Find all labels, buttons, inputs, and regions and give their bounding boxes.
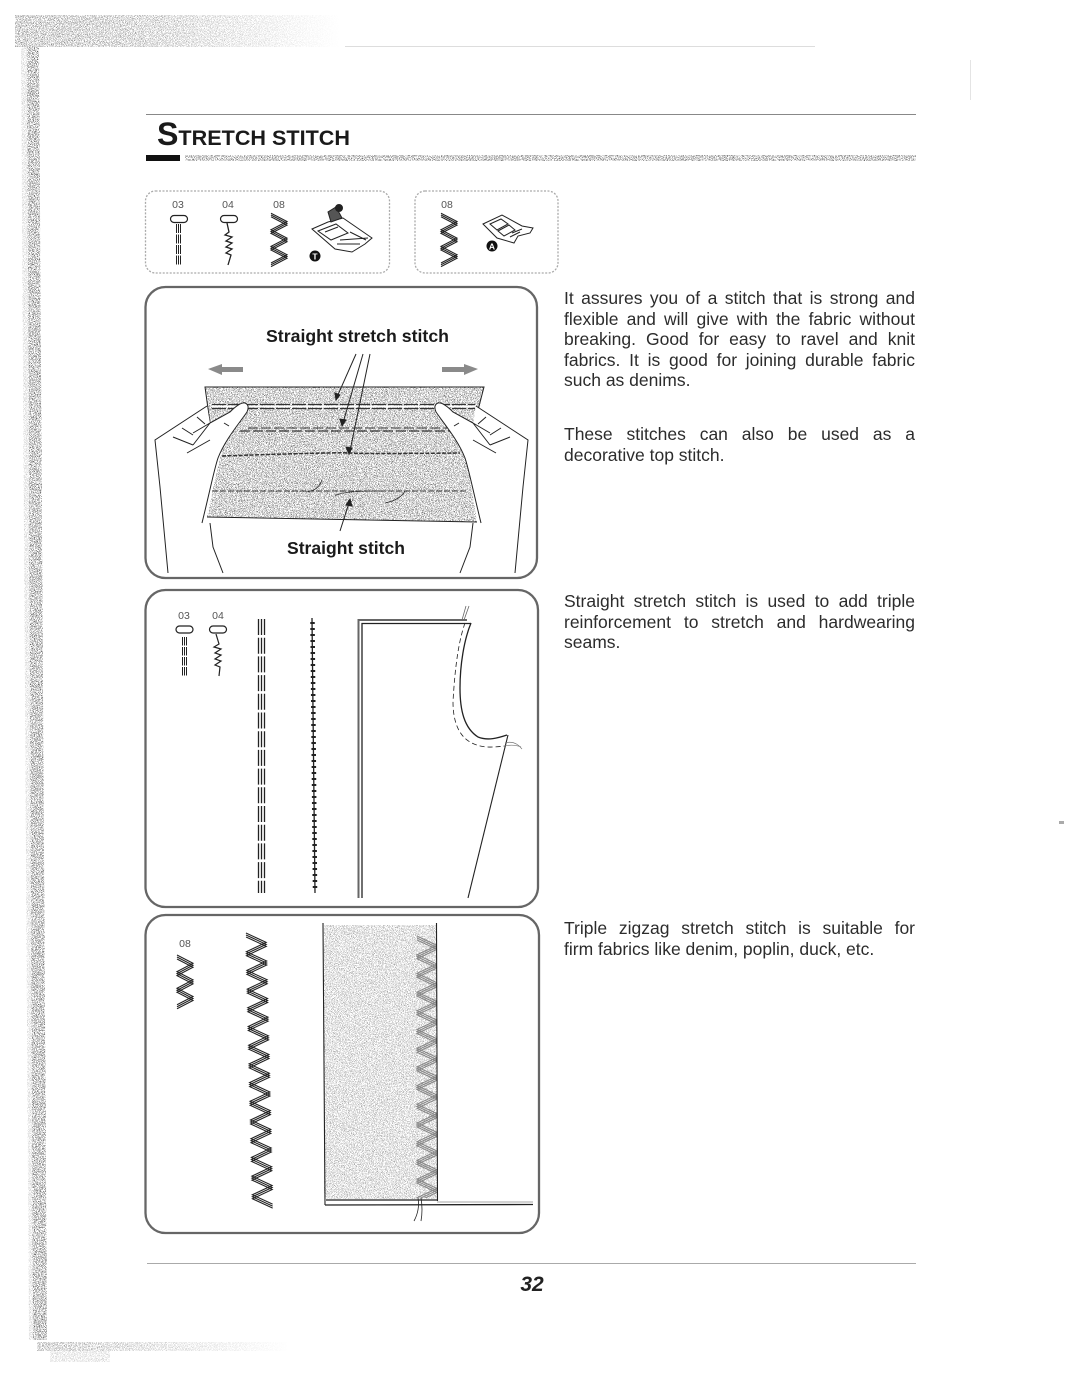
arrow: pull right xyxy=(442,364,478,375)
stitch numbers xyxy=(172,199,285,211)
stitch number: 08 xyxy=(179,938,191,950)
panel: straight stretch seam on trousers xyxy=(146,590,538,907)
arrow: pull left xyxy=(208,364,243,375)
text block: strength and uses: It assures you of a stitch that is strong and xyxy=(564,288,915,308)
stitch numbers: 08 xyxy=(273,199,285,211)
icon: badge T xyxy=(310,250,320,262)
left hand xyxy=(155,403,248,573)
illustration: trousers seam xyxy=(358,606,522,898)
label: straight stitch: Straight stitch xyxy=(287,538,405,558)
icon: needle positions xyxy=(176,626,226,633)
panel: stitch selection with foot T xyxy=(146,191,390,273)
stitch numbers: 04 xyxy=(212,610,224,622)
text block: triple zigzag stretch stitch: Triple zigzag stretch stitch is suitable for xyxy=(564,918,915,938)
panel: triple zigzag stretch stitch xyxy=(146,915,539,1233)
text block: triple zigzag stretch stitch: firm fabrics like denim, poplin, duck, etc. xyxy=(564,939,874,959)
icon: needle position 04 xyxy=(220,216,238,222)
panel: stitch selection with foot A xyxy=(415,191,558,273)
text block: straight stretch stitch: Straight stretch stitch is used to add triple xyxy=(564,591,915,611)
icon: triple zigzag stitch xyxy=(441,213,457,267)
text block: strength and uses xyxy=(564,288,915,390)
sample: tall triple zigzag xyxy=(246,933,273,1208)
icon: badge A xyxy=(486,240,498,252)
stitch number: 08 xyxy=(441,199,453,211)
text block: strength and uses: flexible and will give with the fabric without xyxy=(564,309,915,329)
stitch numbers xyxy=(178,610,224,622)
icon: badge A: A xyxy=(489,242,495,252)
icon: presser foot A xyxy=(483,215,533,243)
text block: straight stretch stitch: reinforcement to stretch and hardwearing xyxy=(564,612,915,632)
icon: stretch zigzag stitch xyxy=(225,223,232,265)
text block: decorative use: These stitches can also be used as a xyxy=(564,424,915,444)
icon: triple straight stitch xyxy=(176,224,180,265)
sample: tall stretch stitch xyxy=(312,618,315,893)
title bar xyxy=(146,155,916,161)
icon: presser foot T xyxy=(312,204,372,252)
text block: strength and uses: such as denims. xyxy=(564,370,690,390)
title: STRETCH STITCH xyxy=(157,116,350,152)
header rule xyxy=(146,114,916,115)
icon: needle position 03 xyxy=(170,216,188,222)
label: straight stretch stitch: Straight stretch stitch xyxy=(266,326,449,346)
stitch numbers: 04 xyxy=(222,199,234,211)
panel: straight stretch stitch fabric test xyxy=(146,287,537,578)
text block: straight stretch stitch xyxy=(564,591,915,652)
text block: decorative use xyxy=(564,424,915,465)
callout arrows: straight stretch stitch xyxy=(335,354,370,454)
text block: triple zigzag stretch stitch xyxy=(564,918,915,959)
illustration: zigzag on denim hem xyxy=(323,923,533,1221)
page number: 32 xyxy=(520,1273,544,1296)
callout arrow: straight stitch xyxy=(340,499,352,531)
icon: triple zigzag stitch xyxy=(271,213,287,267)
stitch numbers: 03 xyxy=(178,610,190,622)
stitch numbers: 03 xyxy=(172,199,184,211)
icon: small stretch stitch xyxy=(214,634,221,676)
stitch lines xyxy=(212,404,475,503)
text block: decorative use: decorative top stitch. xyxy=(564,445,724,465)
text block: strength and uses: fabrics. It is good for joining durable fabric xyxy=(564,350,915,370)
icon: small triple zigzag xyxy=(177,955,193,1009)
text block: straight stretch stitch: seams. xyxy=(564,632,620,652)
footer rule xyxy=(147,1263,916,1264)
sample: tall triple straight stitch xyxy=(258,619,264,893)
right hand xyxy=(435,403,528,573)
fabric xyxy=(205,387,484,522)
icon: small triple stitch xyxy=(182,637,186,676)
text block: strength and uses: breaking. Good for easy to ravel and knit xyxy=(564,329,915,349)
icon: badge T: T xyxy=(312,252,318,262)
